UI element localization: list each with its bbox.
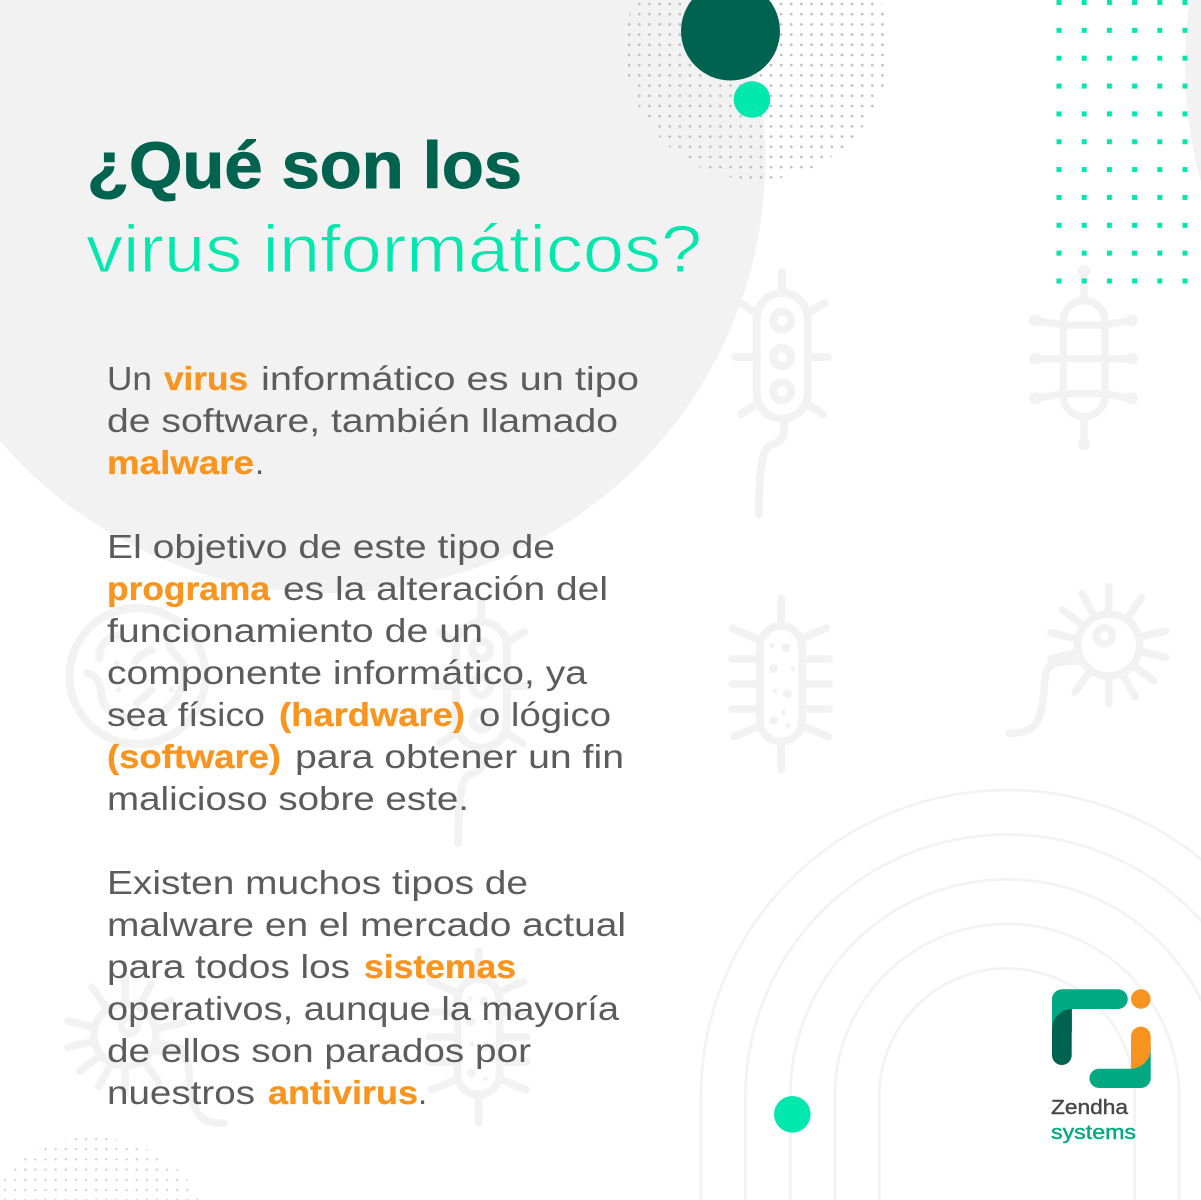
text block: paragraph 2: funcionamiento de un [107, 612, 483, 649]
text block: paragraph 3: nuestros [107, 1074, 255, 1111]
logo wordmark: Zendha [1051, 1097, 1129, 1119]
text block: paragraph 3: malware en el mercado actual [107, 906, 626, 943]
text block: paragraph 2: componente informático, ya [107, 654, 588, 691]
halftone dot circle top [628, 2, 884, 179]
icon: spiny bacterium with dots [732, 598, 829, 770]
text block: paragraph 3: Existen muchos tipos de [107, 864, 528, 901]
text block: paragraph 2: malicioso sobre este. [107, 780, 469, 817]
text block: paragraph 1: . [255, 444, 264, 481]
text block: paragraph 3 [107, 864, 626, 1111]
text block: paragraph 3: antivirus [268, 1074, 418, 1111]
logo mark [1052, 989, 1151, 1088]
text block: paragraph 1: informático es un tipo [261, 360, 639, 397]
green square dot grid [1056, 0, 1201, 284]
text block: paragraph 2: para obtener un fin [295, 738, 624, 775]
large grey background circle [0, 0, 766, 593]
icon: ghost bacterium behind text [434, 601, 527, 843]
text block: paragraph 3: . [418, 1074, 427, 1111]
text block: paragraph 2: sea físico [107, 696, 265, 733]
text block: paragraph 3: para todos los [107, 948, 350, 985]
logo: Zendha systems [1051, 989, 1151, 1144]
text block: paragraph 2: El objetivo de este tipo de [107, 528, 555, 565]
text block: paragraph 2: o lógico [479, 696, 611, 733]
text block: paragraph 2: programa [107, 570, 271, 607]
title [86, 128, 702, 287]
text block: paragraph 2: (hardware) [279, 696, 465, 733]
text block: paragraph 2 [107, 528, 624, 817]
icon: ladder bacterium [1029, 265, 1138, 450]
mint circle bottom [774, 1096, 811, 1133]
logo wordmark [1051, 1097, 1136, 1144]
text block: paragraph 1 [107, 360, 639, 481]
text block: paragraph 1: virus [164, 360, 248, 397]
text block: paragraph 2: (software) [107, 738, 281, 775]
icon: ghost brain circle behind text [70, 608, 206, 744]
icon: ghost round virus behind text [68, 977, 224, 1123]
grey circle at top right edge [1185, 0, 1201, 501]
text block: paragraph 1: malware [107, 444, 254, 481]
icon: ghost spiny bacterium behind text [430, 951, 527, 1123]
text block: paragraph 1: Un [107, 360, 152, 397]
text block: paragraph 3: de ellos son parados por [107, 1032, 531, 1069]
text block: paragraph 3: sistemas [364, 948, 516, 985]
text block: paragraph 1: de software, también llamado [107, 402, 618, 439]
icon: round virus with rays and tail [1009, 587, 1166, 733]
logo wordmark: systems [1051, 1122, 1136, 1144]
concentric arches bottom right [701, 790, 1201, 1200]
text block: paragraph 2: es la alteración del [283, 570, 608, 607]
icon: bacterium with rings and tail [735, 272, 828, 514]
halftone dot circle bottom left [4, 1138, 199, 1200]
dark green circle [681, 0, 780, 80]
title: ¿Qué son los [87, 128, 522, 202]
title: virus informáticos? [86, 212, 702, 287]
text block: paragraph 3: operativos, aunque la mayoría [107, 990, 620, 1027]
mint circle top [734, 81, 770, 118]
